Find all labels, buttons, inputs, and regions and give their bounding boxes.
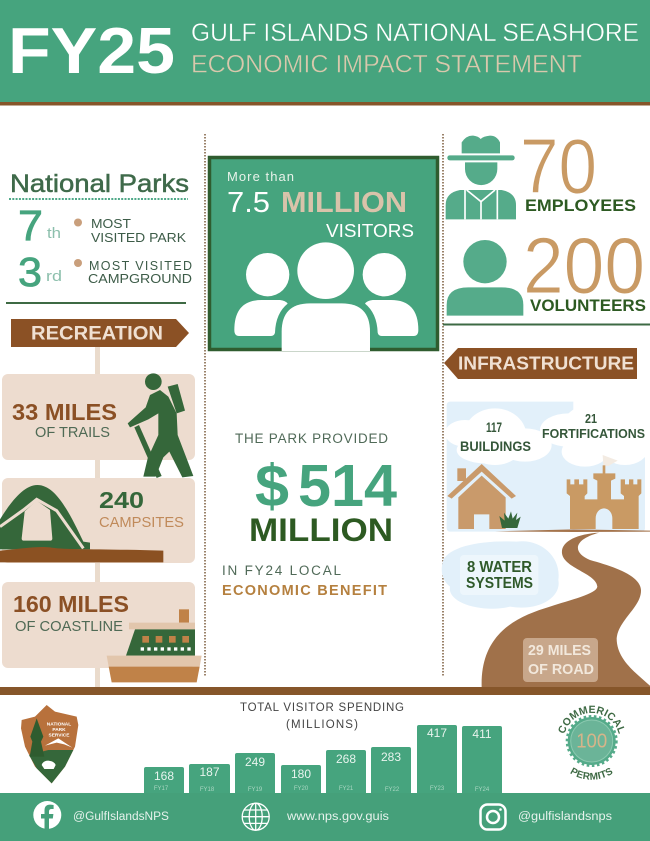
panel: economic benefit: IN FY24 LOCAL: [222, 563, 341, 578]
bar values: 268: [336, 752, 356, 766]
logo: NPS arrowhead: SERVICE: [49, 732, 70, 738]
pond: water systems: [442, 541, 559, 609]
figure: $514: $: [255, 453, 289, 519]
bar values: 249: [245, 755, 265, 769]
title: park name: GULF ISLANDS NATIONAL SEASHORE: [191, 19, 639, 47]
icon: tent: [0, 485, 163, 562]
bar values: [154, 726, 492, 783]
sign: infrastructure: INFRASTRUCTURE: [458, 354, 634, 374]
heading: National Parks: National Parks: [10, 170, 189, 198]
panel: infrastructure illustration: 8 WATER: [467, 559, 532, 576]
subtitle: ECONOMIC IMPACT STATEMENT: [191, 50, 582, 78]
chart: total visitor spending: [144, 702, 502, 797]
bar year labels: FY20: [294, 786, 309, 792]
panel: economic benefit: THE PARK PROVIDED: [235, 431, 388, 446]
bar values: 411: [472, 727, 492, 741]
card: coastline: 160 MILES: [13, 591, 129, 617]
logo: NPS arrowhead: [21, 705, 78, 783]
footer: contact bar: @GulfIslandsNPS: [73, 811, 169, 823]
bar year labels: FY24: [475, 787, 490, 793]
road: [482, 529, 650, 687]
panel: national parks rankings: [6, 170, 192, 304]
card: coastline: [2, 582, 202, 682]
heading: FY25: FY25: [8, 14, 175, 87]
bar year labels: FY23: [430, 786, 445, 792]
rank: 7th most visited park: th: [47, 225, 61, 242]
badge: commercial permits: 100: [576, 730, 607, 752]
panel: visitors: MILLION: [281, 187, 407, 219]
chart title: TOTAL VISITOR SPENDING: [240, 702, 404, 714]
bar values: 168: [154, 769, 174, 783]
icon: instagram: [480, 804, 506, 830]
card: campsites: 240: [99, 487, 144, 513]
sign: recreation: RECREATION: [31, 324, 163, 344]
card: trails: [2, 373, 195, 478]
bar year labels: FY19: [248, 787, 263, 793]
sky and clouds: [445, 400, 648, 532]
chart title: (MILLIONS): [286, 719, 358, 731]
rank: 3rd most visited campground: CAMPGROUND: [88, 272, 192, 286]
label: fortifications: [542, 412, 645, 441]
panel: economic benefit: MILLION: [249, 512, 393, 548]
panel: infrastructure illustration: SYSTEMS: [466, 575, 533, 592]
bar values: 187: [199, 765, 220, 779]
rank: 7th most visited park: [18, 202, 187, 250]
bar year labels: FY18: [200, 787, 215, 793]
figure: $514: [255, 453, 397, 519]
card: campsites: [0, 478, 195, 563]
label: road miles: [523, 638, 598, 682]
label: road miles: OF ROAD: [528, 661, 594, 678]
card: coastline: OF COASTLINE: [15, 618, 123, 635]
panel: economic benefit: ECONOMIC BENEFIT: [222, 583, 387, 599]
label: buildings: 117: [486, 420, 502, 435]
signpost post: [95, 347, 100, 688]
icon: house: [447, 464, 516, 529]
panel: volunteers: [447, 221, 646, 316]
footer: contact bar: @gulfislandsnps: [518, 811, 612, 823]
footer: contact bar: www.nps.gov.guis: [286, 811, 389, 823]
sign: infrastructure: [444, 348, 637, 379]
label: road miles: 29 MILES: [528, 642, 591, 659]
badge: commercial permits: PERMITS: [570, 767, 612, 780]
panel: infrastructure illustration: [442, 400, 650, 687]
panel: employees: EMPLOYEES: [525, 196, 636, 215]
bar values: 180: [291, 767, 311, 781]
icon: ranger: [446, 136, 516, 219]
rank: 7th most visited park: MOST: [91, 217, 131, 231]
bar values: 417: [427, 726, 447, 740]
label: fortifications: FORTIFICATIONS: [542, 427, 645, 441]
label: buildings: [460, 420, 531, 454]
sign: recreation: [11, 319, 189, 347]
panel: employees: [446, 122, 636, 219]
bars: [144, 725, 502, 797]
panel: visitors: [210, 158, 438, 351]
rank: 7th most visited park: 7: [18, 202, 43, 250]
rank: 3rd most visited campground: 3: [18, 249, 42, 295]
icon: bush: [499, 511, 521, 528]
rank: 7th most visited park: VISITED PARK: [91, 231, 187, 245]
header banner: [0, 0, 650, 106]
rank: 3rd most visited campground: [18, 249, 192, 295]
figure: $514: 514: [298, 453, 397, 519]
chart title: [240, 702, 404, 731]
icon: globe: [242, 803, 269, 830]
bar values: 283: [381, 750, 401, 764]
icon: castle: [567, 455, 641, 529]
panel: visitors: More than: [227, 169, 294, 184]
panel: volunteers: VOLUNTEERS: [530, 296, 646, 315]
rank: 3rd most visited campground: rd: [46, 268, 62, 285]
label: buildings: BUILDINGS: [460, 439, 531, 454]
card: trails: 33 MILES: [12, 399, 117, 425]
label: fortifications: 21: [585, 412, 597, 426]
panel: economic benefit: [222, 431, 397, 599]
logo: NPS arrowhead: NATIONAL: [47, 722, 71, 728]
bar year labels: FY17: [154, 786, 169, 792]
panel: visitors: VISITORS: [326, 221, 414, 241]
card: trails: OF TRAILS: [35, 424, 110, 441]
icon: group of people: [234, 242, 418, 351]
icon: ferry boat: [107, 609, 202, 682]
icon: hiker: [128, 373, 193, 478]
footer: contact bar: [0, 793, 650, 841]
bar year labels: FY22: [385, 787, 400, 793]
badge: commercial permits: [558, 706, 624, 780]
icon: facebook: [33, 801, 61, 829]
badge: commercial permits: COMMERICAL: [558, 706, 624, 734]
bar year labels: [154, 786, 490, 793]
rank: 3rd most visited campground: MOST VISITED: [89, 259, 192, 273]
panel: employees: 70: [520, 122, 597, 210]
bar year labels: FY21: [339, 786, 354, 792]
icon: volunteer: [447, 240, 523, 316]
panel: visitors: 7.5: [227, 187, 270, 219]
logo: NPS arrowhead: PARK: [52, 727, 66, 733]
card: campsites: CAMPSITES: [99, 514, 184, 531]
